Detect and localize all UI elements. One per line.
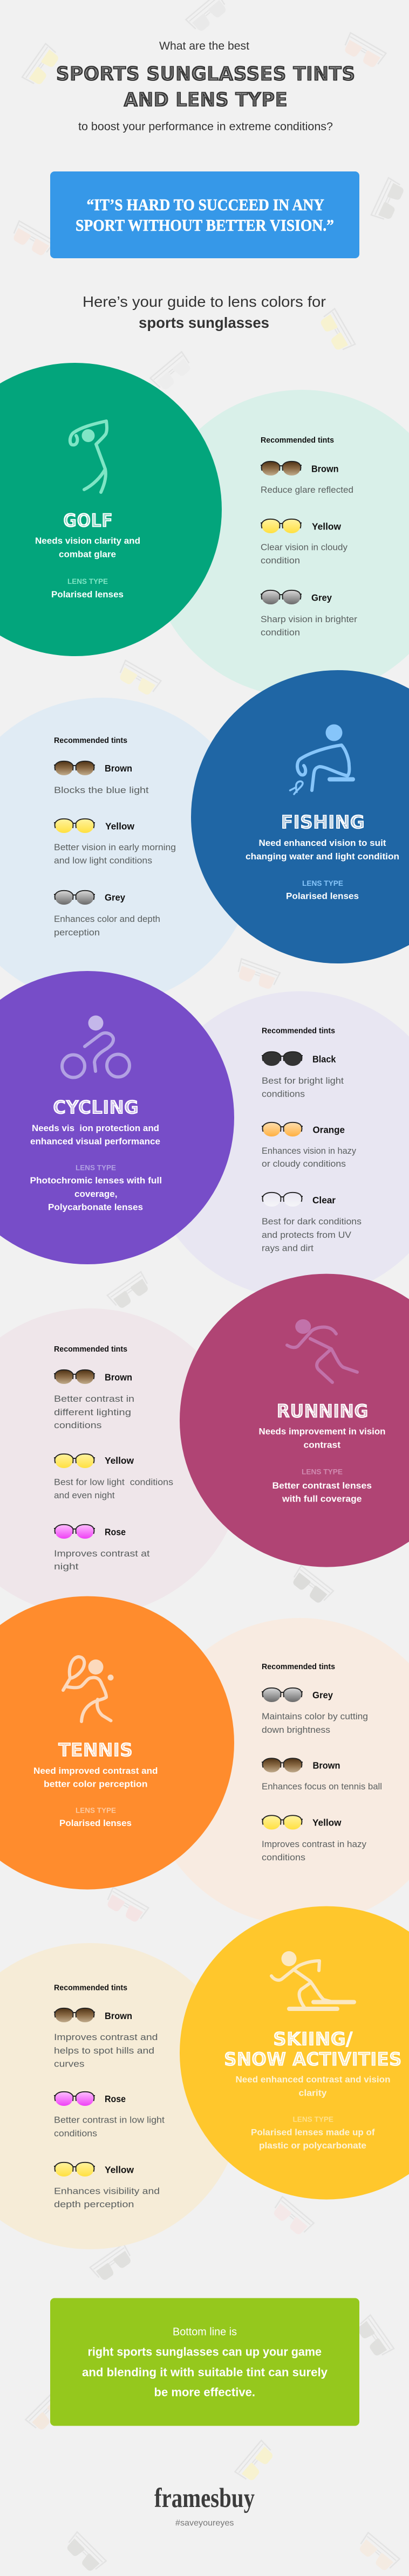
- header text block: [56, 40, 355, 133]
- tint: yellow: Yellow: [312, 521, 341, 532]
- tint: brown: [54, 761, 149, 795]
- fishing lens type: [286, 879, 359, 901]
- tint: grey: Maintains color by cutting: [262, 1711, 368, 1721]
- panel: fishing: [0, 670, 409, 1005]
- tennis lens type: [59, 1806, 132, 1828]
- running needs: [259, 1427, 385, 1450]
- tint: brown: conditions: [54, 1420, 101, 1430]
- skiing heading: [224, 2028, 401, 2070]
- tint: grey: down brightness: [262, 1725, 330, 1735]
- tint: brown: [262, 1758, 382, 1792]
- tint: yellow: and low light conditions: [54, 855, 152, 866]
- tennis heading: TENNIS: [58, 1739, 133, 1761]
- running needs: contrast: [303, 1439, 340, 1450]
- tint: rose: Better contrast in low light: [54, 2114, 165, 2125]
- fishing needs: changing water and light condition: [246, 851, 399, 862]
- golf recommended tints heading: Recommended tints: [261, 436, 334, 445]
- running lens type: [272, 1468, 372, 1504]
- callout: bottom line: right sports sunglasses can up your game: [87, 2345, 322, 2358]
- golf lens type: LENS TYPE: [67, 577, 108, 586]
- tint: grey: perception: [54, 927, 100, 938]
- skiing lens type: LENS TYPE: [292, 2114, 333, 2123]
- callout: bottom line: [50, 2298, 359, 2426]
- panel: cycling: [0, 971, 409, 1298]
- cycling lens type: Photochromic lenses with full: [30, 1175, 162, 1186]
- skiing main circle: [180, 1906, 409, 2200]
- tint: brown: Brown: [105, 2010, 132, 2021]
- tint: yellow: Yellow: [105, 2164, 134, 2175]
- tint: yellow: Better vision in early morning: [54, 842, 176, 852]
- tint: rose: night: [54, 1561, 79, 1572]
- skiing needs: [235, 2075, 391, 2098]
- tint: orange: Orange: [313, 1125, 345, 1135]
- tint: brown: Brown: [313, 1760, 340, 1771]
- cycling main circle: [0, 971, 234, 1264]
- tint: black: Black: [312, 1053, 336, 1064]
- tint: yellow: Improves contrast in hazy: [262, 1839, 366, 1849]
- intro line: What are the best: [159, 40, 249, 52]
- tint: brown: Brown: [311, 464, 339, 474]
- tint: yellow: Yellow: [105, 821, 134, 831]
- skiing heading: SNOW ACTIVITIES: [224, 2049, 401, 2070]
- tint: grey: Grey: [311, 592, 332, 603]
- icon: golfer: [70, 421, 107, 492]
- icon: skier: [271, 1951, 354, 2009]
- tint: yellow: Yellow: [105, 1455, 134, 1466]
- tint: grey: Grey: [312, 1690, 333, 1700]
- callout: bottom line: Bottom line is: [173, 2326, 237, 2338]
- golf lens type: Polarised lenses: [51, 589, 124, 600]
- golf tints background circle: [148, 390, 409, 697]
- skiing lens type: plastic or polycarbonate: [259, 2140, 366, 2151]
- tint: clear: and protects from UV: [262, 1230, 352, 1240]
- running lens type: Better contrast lenses: [272, 1480, 372, 1491]
- tennis main circle: [0, 1596, 234, 1890]
- logo: framesbuy: framesbuy: [154, 2483, 255, 2513]
- callout: quote: [50, 171, 359, 258]
- tint: yellow: [261, 519, 347, 566]
- tennis needs: [33, 1766, 158, 1789]
- tint: yellow: [54, 2162, 160, 2209]
- running needs: Needs improvement in vision: [259, 1427, 385, 1436]
- tint: brown: Enhances focus on tennis ball: [262, 1781, 382, 1792]
- tint: grey: Sharp vision in brighter: [261, 614, 357, 624]
- panel: skiing / snow activities: [0, 1906, 409, 2249]
- cycling lens type: Polycarbonate lenses: [48, 1202, 143, 1212]
- running tints background circle: [0, 1308, 244, 1616]
- tint: black: conditions: [262, 1089, 305, 1099]
- icon: tennis player: [63, 1657, 113, 1721]
- tint: yellow: [54, 1454, 173, 1500]
- cycling needs: Needs vis ion protection and: [32, 1123, 159, 1133]
- fishing needs: Need enhanced vision to suit: [259, 838, 386, 848]
- fishing main circle: [191, 670, 409, 963]
- tint: brown: helps to spot hills and: [54, 2045, 154, 2056]
- fishing tints background circle: [0, 698, 256, 1005]
- tint: brown: [54, 2008, 158, 2069]
- tint: yellow: Clear vision in cloudy: [261, 542, 347, 552]
- tint: clear: Best for dark conditions: [262, 1216, 362, 1227]
- tint: brown: Blocks the blue light: [54, 785, 149, 795]
- cycling needs: [30, 1123, 160, 1146]
- tint: yellow: depth perception: [54, 2199, 134, 2209]
- running lens type: with full coverage: [282, 1493, 362, 1504]
- tint: brown: curves: [54, 2058, 84, 2069]
- tint: yellow: [262, 1815, 366, 1862]
- tennis lens type: Polarised lenses: [59, 1818, 132, 1828]
- callout: bottom line: be more effective.: [154, 2385, 255, 2399]
- callout: quote: “IT’S HARD TO SUCCEED IN ANY: [86, 195, 324, 214]
- tint: brown: [54, 1370, 134, 1430]
- golf lens type: [51, 577, 124, 600]
- cycling lens type: [30, 1163, 162, 1212]
- panel: golf: [0, 363, 409, 697]
- skiing needs: Need enhanced contrast and vision: [235, 2075, 391, 2084]
- golf needs: combat glare: [59, 549, 116, 560]
- tint: clear: Clear: [312, 1195, 336, 1206]
- tennis needs: Need improved contrast and: [33, 1766, 158, 1776]
- tint: yellow: Yellow: [312, 1817, 342, 1828]
- tint: grey: [262, 1688, 368, 1735]
- tint: yellow: condition: [261, 555, 300, 566]
- tint: brown: Better contrast in: [54, 1394, 134, 1404]
- fishing lens type: Polarised lenses: [286, 891, 359, 901]
- skiing heading: SKIING/: [273, 2028, 353, 2050]
- tint: black: Best for bright light: [262, 1076, 344, 1086]
- cycling lens type: coverage,: [74, 1189, 118, 1199]
- skiing lens type: [251, 2114, 375, 2151]
- tennis needs: better color perception: [44, 1779, 148, 1789]
- tint: grey: Enhances color and depth: [54, 914, 160, 924]
- tint: brown: Reduce glare reflected: [261, 485, 353, 495]
- skiing tints background circle: [0, 1943, 243, 2249]
- callout: bottom line: and blending it with suitable tint can surely: [82, 2366, 328, 2379]
- section heading: [83, 293, 326, 331]
- tint: brown: Brown: [105, 763, 132, 774]
- tint: orange: [262, 1122, 356, 1169]
- panel: running: [0, 1274, 409, 1616]
- tint: yellow: Enhances visibility and: [54, 2186, 160, 2196]
- cycling lens type: LENS TYPE: [76, 1163, 116, 1172]
- icon: fisherman: [290, 725, 353, 794]
- section heading: Here’s your guide to lens colors for: [83, 293, 326, 310]
- tint: rose: Rose: [105, 1527, 126, 1538]
- tint: rose: Rose: [105, 2093, 126, 2104]
- cycling heading: CYCLING: [53, 1097, 139, 1118]
- panel: tennis: [0, 1596, 409, 1925]
- fishing lens type: LENS TYPE: [302, 879, 343, 887]
- cycling needs: enhanced visual performance: [30, 1137, 160, 1146]
- tint: yellow: conditions: [262, 1852, 305, 1862]
- tint: grey: condition: [261, 628, 300, 637]
- tint: clear: rays and dirt: [262, 1243, 313, 1253]
- hashtag: #saveyoureyes: [175, 2519, 234, 2527]
- tint: rose: conditions: [54, 2129, 97, 2138]
- section heading: sports sunglasses: [139, 314, 269, 331]
- tint: yellow: [54, 819, 176, 866]
- fishing needs: [246, 838, 399, 862]
- tint: brown: Brown: [105, 1372, 132, 1382]
- tint: grey: [261, 590, 357, 637]
- callout: quote: SPORT WITHOUT BETTER VISION.”: [76, 216, 334, 235]
- skiing needs: clarity: [299, 2088, 327, 2098]
- running heading: RUNNING: [276, 1401, 368, 1422]
- tennis recommended tints heading: Recommended tints: [262, 1663, 335, 1671]
- golf main circle: [0, 363, 222, 656]
- tint: grey: [54, 891, 160, 938]
- tint: yellow: and even night: [54, 1490, 115, 1500]
- tint: brown: Improves contrast and: [54, 2032, 158, 2042]
- tint: rose: [54, 1525, 150, 1572]
- tint: yellow: Best for low light conditions: [54, 1477, 173, 1487]
- icon: runner: [287, 1319, 357, 1382]
- tint: grey: Grey: [105, 892, 125, 903]
- tennis tints background circle: [146, 1618, 409, 1925]
- tint: rose: Improves contrast at: [54, 1548, 150, 1559]
- running lens type: LENS TYPE: [302, 1468, 343, 1476]
- subtitle: to boost your performance in extreme conditions?: [78, 121, 333, 133]
- title: AND LENS TYPE: [124, 89, 288, 111]
- tint: orange: Enhances vision in hazy: [262, 1146, 356, 1156]
- cycling tints background circle: [146, 991, 409, 1298]
- tint: brown: [261, 462, 353, 495]
- fishing heading: FISHING: [281, 812, 365, 832]
- running main circle: [180, 1274, 409, 1567]
- tint: black: [262, 1052, 344, 1099]
- icon: cyclist: [62, 1016, 129, 1077]
- tint: rose: [54, 2092, 165, 2138]
- golf needs: Needs vision clarity and: [35, 536, 140, 546]
- tint: clear: [262, 1193, 362, 1253]
- fishing recommended tints heading: Recommended tints: [54, 736, 127, 745]
- tint: orange: or cloudy conditions: [262, 1159, 346, 1169]
- skiing lens type: Polarised lenses made up of: [251, 2127, 375, 2137]
- title: SPORTS SUNGLASSES TINTS: [56, 63, 355, 85]
- title: [56, 63, 355, 111]
- skiing recommended tints heading: Recommended tints: [54, 1984, 127, 1993]
- cycling recommended tints heading: Recommended tints: [262, 1027, 335, 1035]
- golf heading: GOLF: [63, 510, 113, 531]
- tint: brown: different lighting: [54, 1407, 131, 1417]
- running recommended tints heading: Recommended tints: [54, 1345, 127, 1354]
- tennis lens type: LENS TYPE: [76, 1806, 116, 1815]
- golf needs: [35, 536, 140, 560]
